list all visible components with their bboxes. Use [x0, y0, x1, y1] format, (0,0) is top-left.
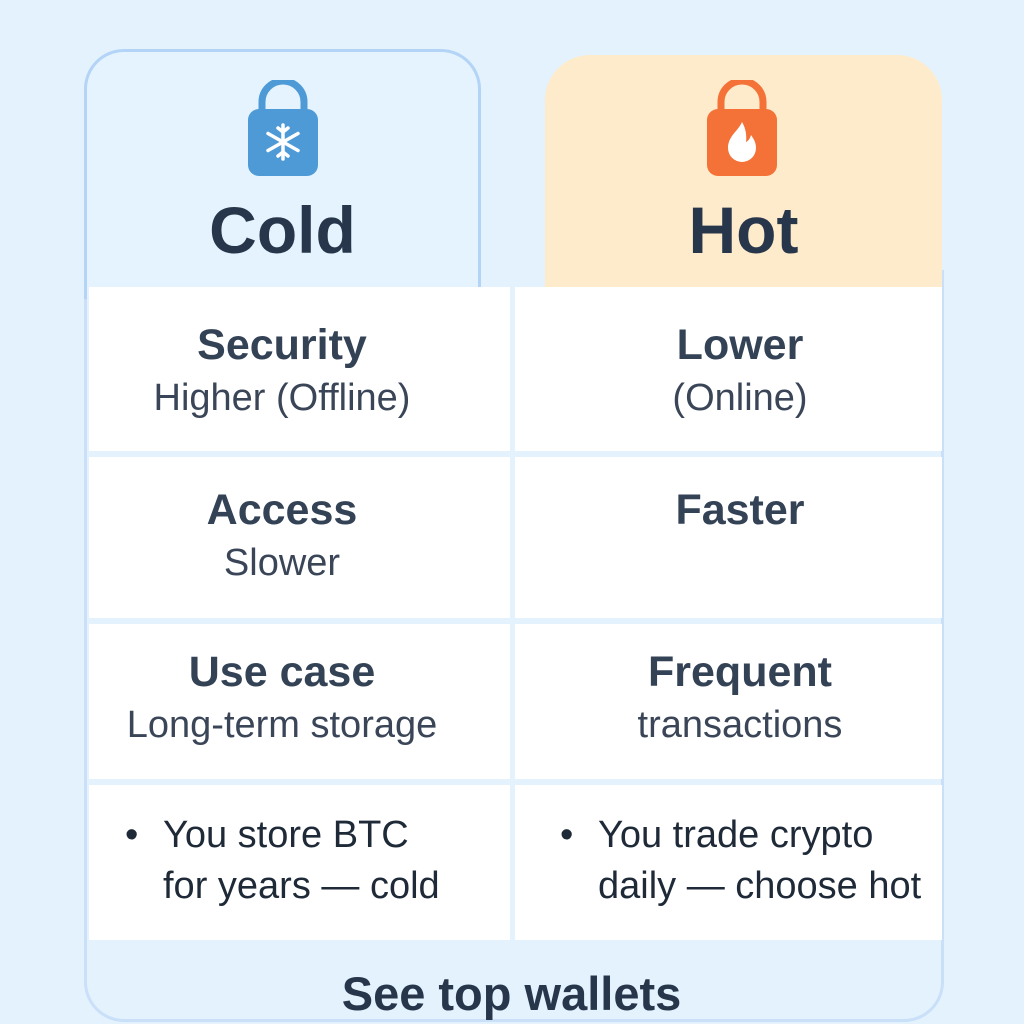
row: use case hot: transactions — [638, 704, 842, 746]
example hot: You trade crypto — [598, 814, 873, 856]
panel: cold header — [84, 49, 481, 299]
row: access hot — [515, 457, 942, 618]
row: use case hot: Frequent — [648, 648, 832, 696]
row: use case cold: Long-term storage — [127, 704, 437, 746]
row: access hot: Faster — [675, 486, 805, 534]
example cold: You store BTC — [163, 814, 409, 856]
row: security cold — [89, 287, 510, 451]
row: use case cold — [89, 624, 510, 779]
example hot: daily — choose hot — [598, 865, 921, 907]
heading: Hot: Hot — [689, 193, 798, 267]
example hot: • — [560, 814, 573, 856]
heading: Cold: Cold — [209, 193, 356, 267]
row: security hot: Lower — [677, 321, 803, 369]
row: security cold: Higher (Offline) — [154, 377, 410, 419]
example cold: • — [125, 814, 138, 856]
row: use case hot — [515, 624, 942, 779]
outer frame — [84, 270, 944, 1022]
row: use case cold: Use case — [189, 648, 375, 696]
example cold: for years — cold — [163, 865, 440, 907]
example cold — [89, 785, 510, 940]
row: security cold: Security — [197, 321, 367, 369]
row: access cold: Access — [207, 486, 357, 534]
row: security hot: (Online) — [672, 377, 808, 419]
icon: cold lock — [248, 80, 318, 176]
example hot — [515, 785, 942, 940]
row: access cold: Slower — [224, 542, 340, 584]
button: see top wallets: See top wallets — [342, 967, 681, 1020]
row: security hot — [515, 287, 942, 451]
row: access cold — [89, 457, 510, 618]
panel: hot header — [545, 55, 942, 295]
icon: hot lock — [707, 80, 777, 176]
